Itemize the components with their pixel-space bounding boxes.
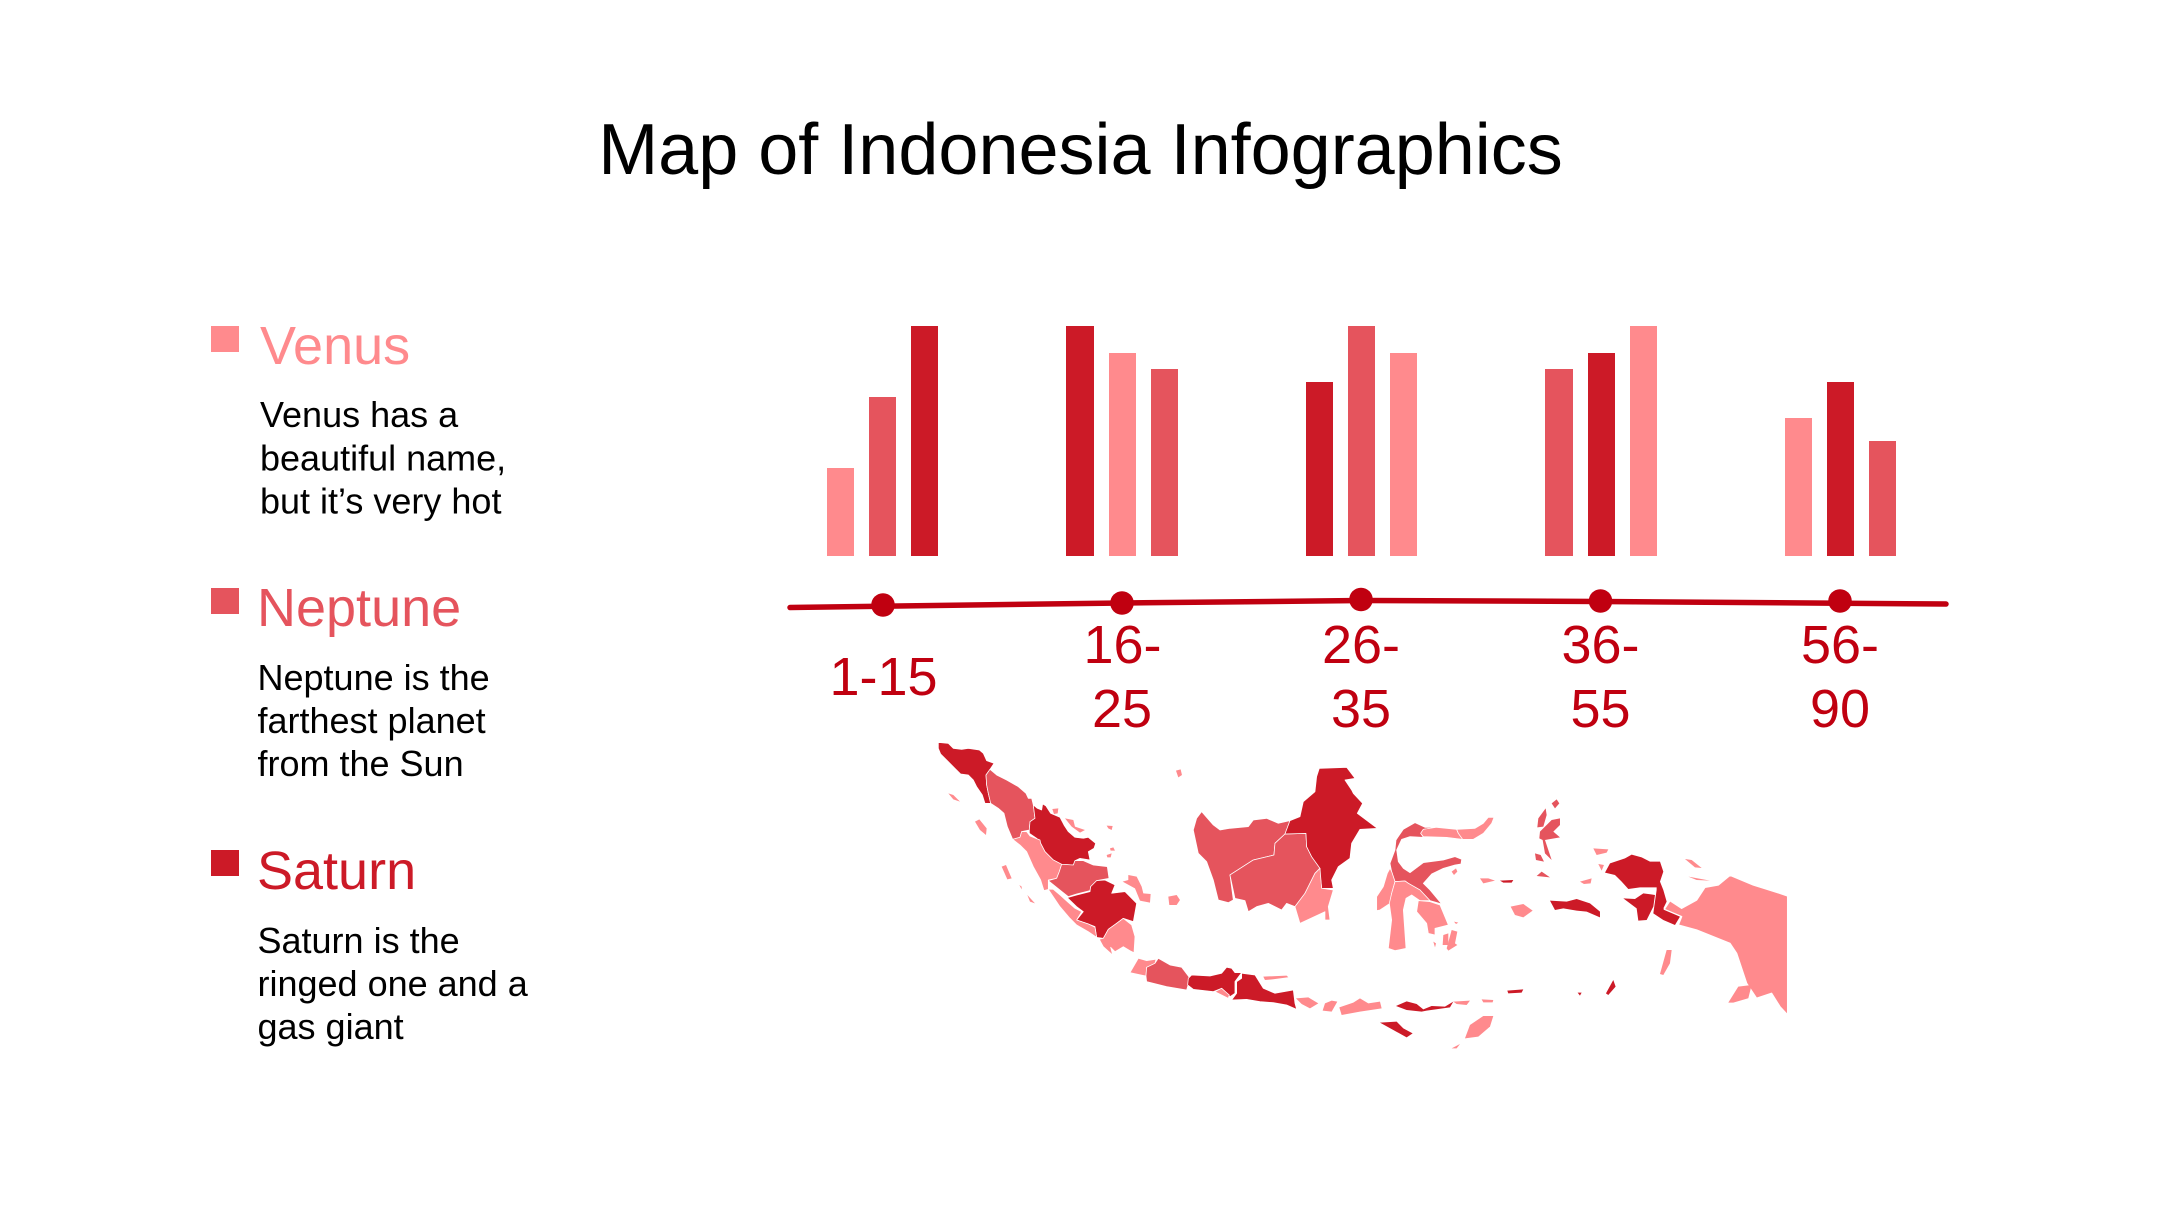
map: Lesser Sunda Islands	[1296, 980, 1616, 1048]
bars: 26-35	[1306, 326, 1417, 556]
legend item: Venus: but it’s very hot	[260, 480, 501, 522]
legend item: Neptune: Neptune is the	[258, 657, 490, 698]
timeline labels: 56-	[1801, 615, 1879, 675]
map: Sulawesi	[1377, 817, 1513, 951]
legend item: Saturn: Saturn	[257, 841, 416, 901]
map: Kalimantan	[1193, 767, 1377, 923]
timeline labels: 26-	[1322, 615, 1400, 675]
bars: 56-90	[1785, 382, 1896, 556]
legend item: Venus: Venus	[260, 316, 410, 376]
bars: 16-25	[1066, 326, 1178, 556]
timeline labels: 36-	[1561, 615, 1640, 675]
legend panel	[211, 316, 529, 1047]
timeline labels: 90	[1810, 679, 1870, 739]
timeline	[790, 588, 1946, 617]
legend item: Saturn: ringed one and a	[258, 963, 529, 1004]
legend item: Saturn: Saturn is the	[258, 920, 460, 961]
legend item: Venus: Venus has a	[260, 394, 459, 435]
bar chart	[827, 326, 1896, 556]
legend item: Neptune: farthest planet	[258, 700, 486, 741]
map: Maluku	[1511, 799, 1608, 917]
timeline labels: 25	[1092, 679, 1152, 739]
legend item: Neptune	[211, 578, 490, 784]
map: Java	[1130, 958, 1297, 1009]
legend item: Neptune: from the Sun	[258, 743, 464, 784]
bars: 36-55	[1545, 326, 1657, 556]
legend item: Saturn	[211, 841, 529, 1047]
title: Map of Indonesia Infographics	[598, 110, 1563, 190]
legend item: Neptune: Neptune	[257, 578, 461, 638]
legend item: Venus	[211, 316, 506, 522]
map of Indonesia	[938, 743, 1788, 1048]
timeline labels: 1-15	[829, 647, 938, 707]
timeline labels: 35	[1331, 679, 1391, 739]
timeline labels	[829, 615, 1879, 739]
map: Sumatra	[938, 743, 1182, 955]
bars: 1-15	[827, 326, 938, 556]
legend item: Saturn: gas giant	[258, 1006, 404, 1047]
timeline labels: 55	[1570, 679, 1631, 739]
legend item: Venus: beautiful name,	[260, 438, 506, 478]
timeline labels: 16-	[1083, 615, 1162, 675]
map: Papua	[1605, 855, 1788, 1015]
